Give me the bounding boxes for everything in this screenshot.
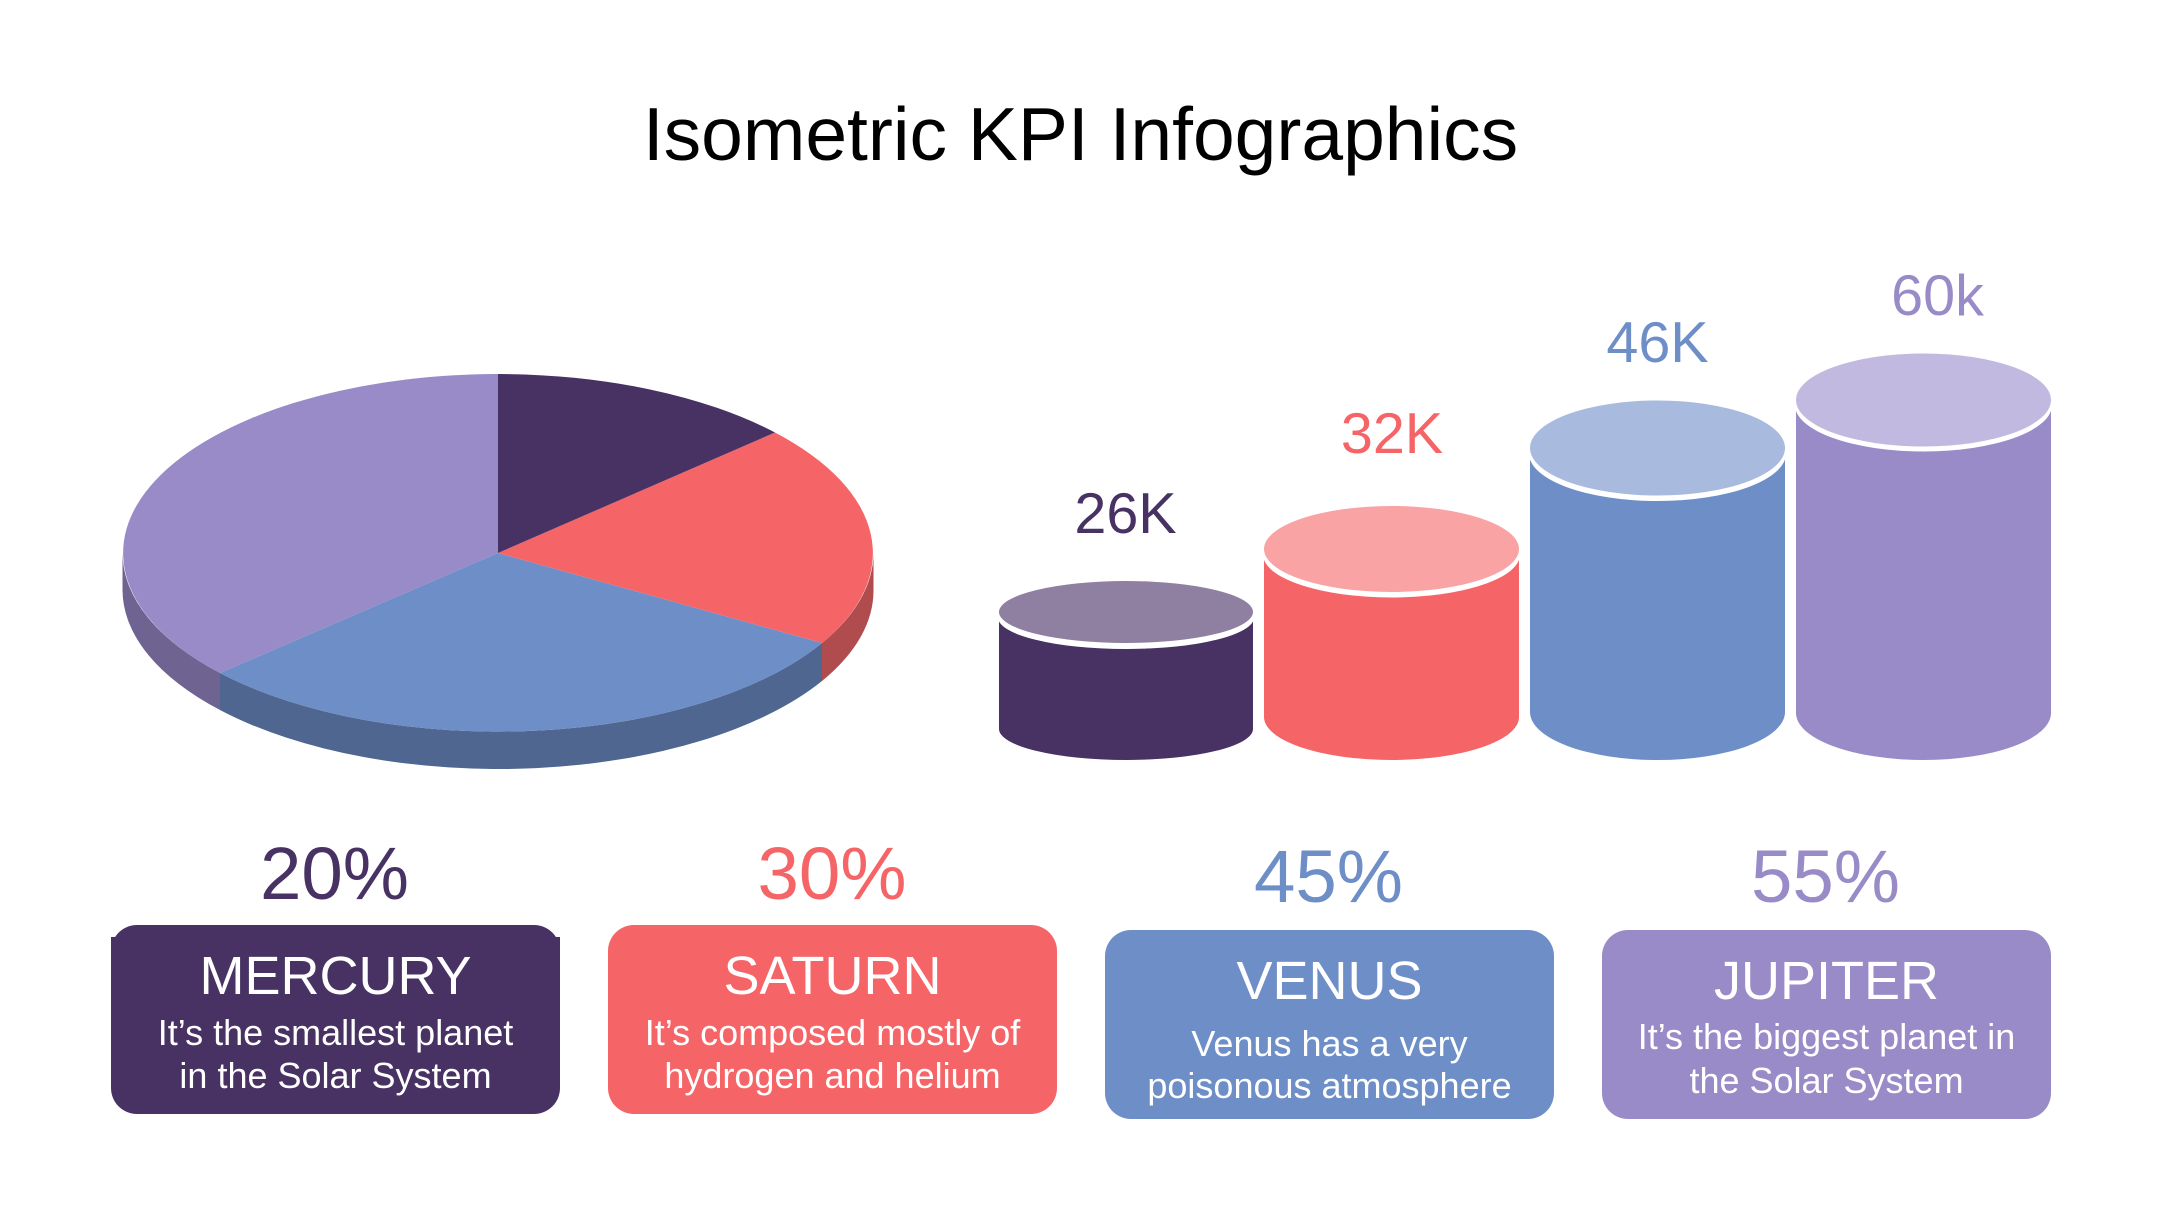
chart: 3D pie	[122, 374, 874, 769]
card: Venus	[1105, 930, 1554, 1119]
panel: Mercury KPI	[111, 832, 560, 1114]
panel: Saturn KPI	[608, 832, 1057, 1114]
card text: Venus: Venus has a very	[1191, 1023, 1468, 1064]
pie side: coral	[822, 553, 874, 681]
card heading: Venus: VENUS	[1236, 951, 1423, 1011]
card heading: Saturn: SATURN	[723, 946, 942, 1006]
pie side: blue	[220, 643, 822, 769]
chart: cylinder bars	[998, 264, 2052, 760]
card: Jupiter	[1602, 930, 2051, 1119]
card text: Saturn: It’s composed mostly of	[645, 1012, 1021, 1053]
cylinder: 32K	[1263, 506, 1520, 760]
pie slice: Venus blue	[220, 553, 822, 732]
pie slice: Saturn coral	[498, 432, 873, 643]
card: Mercury	[111, 925, 560, 1114]
card text: Mercury: in the Solar System	[179, 1055, 492, 1096]
title: Isometric KPI Infographics	[643, 92, 1518, 176]
panel: Venus KPI	[1105, 835, 1554, 1119]
card heading: Mercury: MERCURY	[199, 946, 472, 1006]
percentage: 55%: 55%	[1751, 835, 1900, 918]
cylinder: 60k	[1795, 354, 2052, 760]
panel: Jupiter KPI	[1602, 835, 2051, 1119]
card text: Jupiter: It’s the biggest planet in	[1638, 1016, 2015, 1057]
label: 46K: 46K	[1606, 311, 1709, 375]
card heading: Jupiter: JUPITER	[1714, 951, 1939, 1011]
pie slice: Jupiter purple	[123, 374, 498, 673]
card text: Mercury: It’s the smallest planet	[158, 1012, 513, 1053]
card text: Jupiter: the Solar System	[1689, 1060, 1964, 1101]
pie side: purple	[122, 553, 220, 710]
label: 32K: 32K	[1341, 402, 1443, 466]
percentage: 20%: 20%	[260, 832, 409, 915]
card: Saturn	[608, 925, 1057, 1114]
pie slice: Mercury dark	[498, 374, 775, 553]
cylinder: 26K	[998, 581, 1254, 760]
cylinder: 46K	[1529, 400, 1786, 760]
label: 26K: 26K	[1074, 482, 1177, 546]
percentage: 30%: 30%	[757, 832, 907, 915]
card text: Saturn: hydrogen and helium	[664, 1055, 1001, 1096]
card text: Venus: poisonous atmosphere	[1147, 1065, 1512, 1106]
percentage: 45%: 45%	[1254, 835, 1403, 918]
label: 60k: 60k	[1891, 264, 1984, 328]
